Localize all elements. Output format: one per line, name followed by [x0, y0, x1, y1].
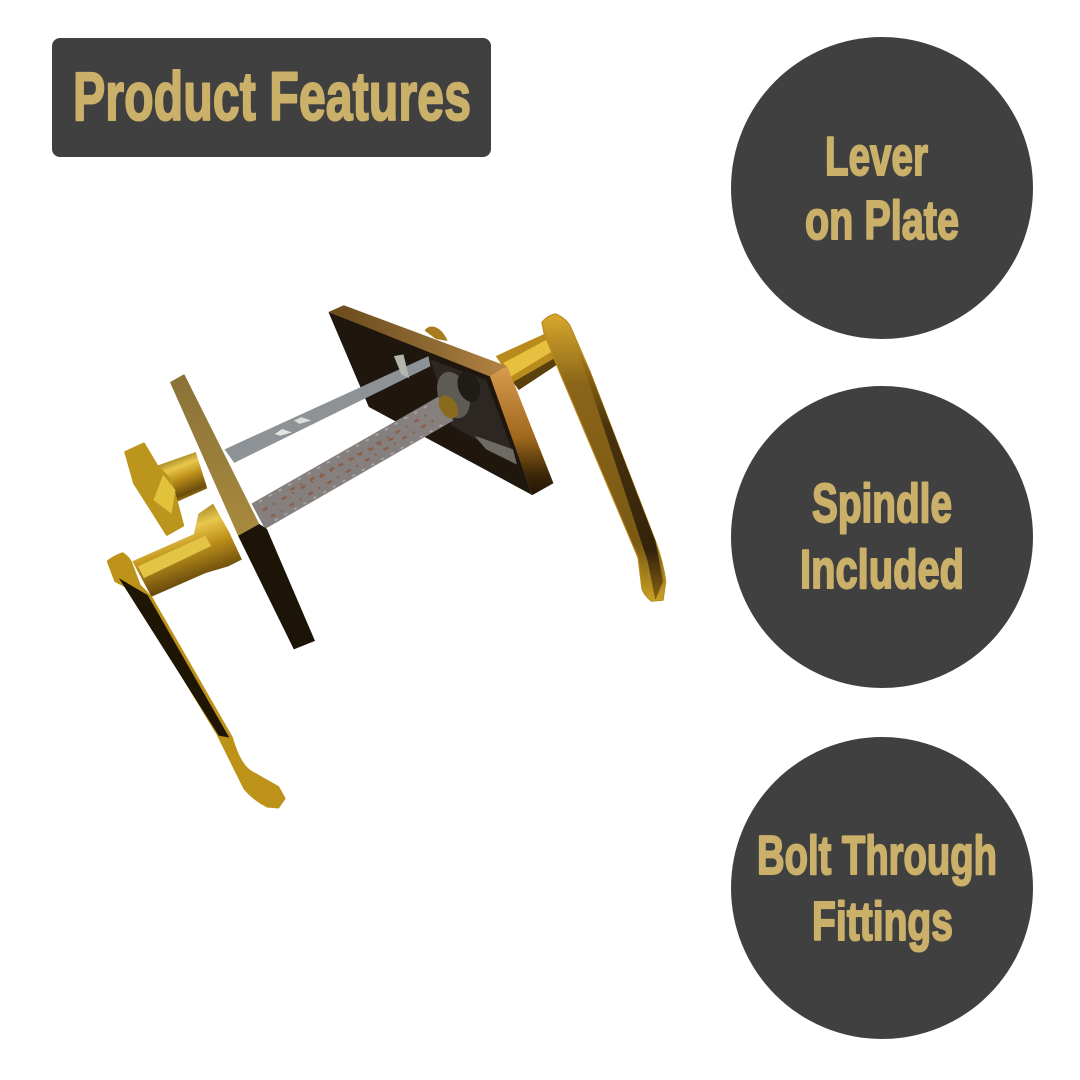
right lever collar	[425, 326, 565, 390]
product photo: brass lever handles on plates with spindles	[107, 305, 666, 808]
far back plate	[328, 305, 553, 495]
feature badge: lever on plate: Lever	[825, 125, 928, 187]
left lever hub	[132, 504, 242, 597]
feature badge: bolt through fittings	[731, 737, 1033, 1039]
near mounting plate	[170, 374, 315, 649]
feature badge: lever on plate: on Plate	[805, 189, 959, 251]
title panel: Product Features	[73, 58, 471, 135]
left lever arm	[107, 553, 285, 808]
feature badge: spindle included	[731, 386, 1033, 688]
feature badge: bolt through fittings: Fittings	[812, 890, 953, 952]
feature badge: lever on plate	[731, 37, 1033, 339]
feature badge: spindle included: Included	[800, 538, 964, 600]
feature badge: spindle included: Spindle	[812, 472, 952, 534]
grey upper spindle	[225, 354, 430, 463]
small thumb turn	[125, 444, 207, 535]
title panel	[52, 38, 491, 157]
rusty lower spindle	[252, 393, 462, 529]
right lever arm	[542, 314, 666, 601]
